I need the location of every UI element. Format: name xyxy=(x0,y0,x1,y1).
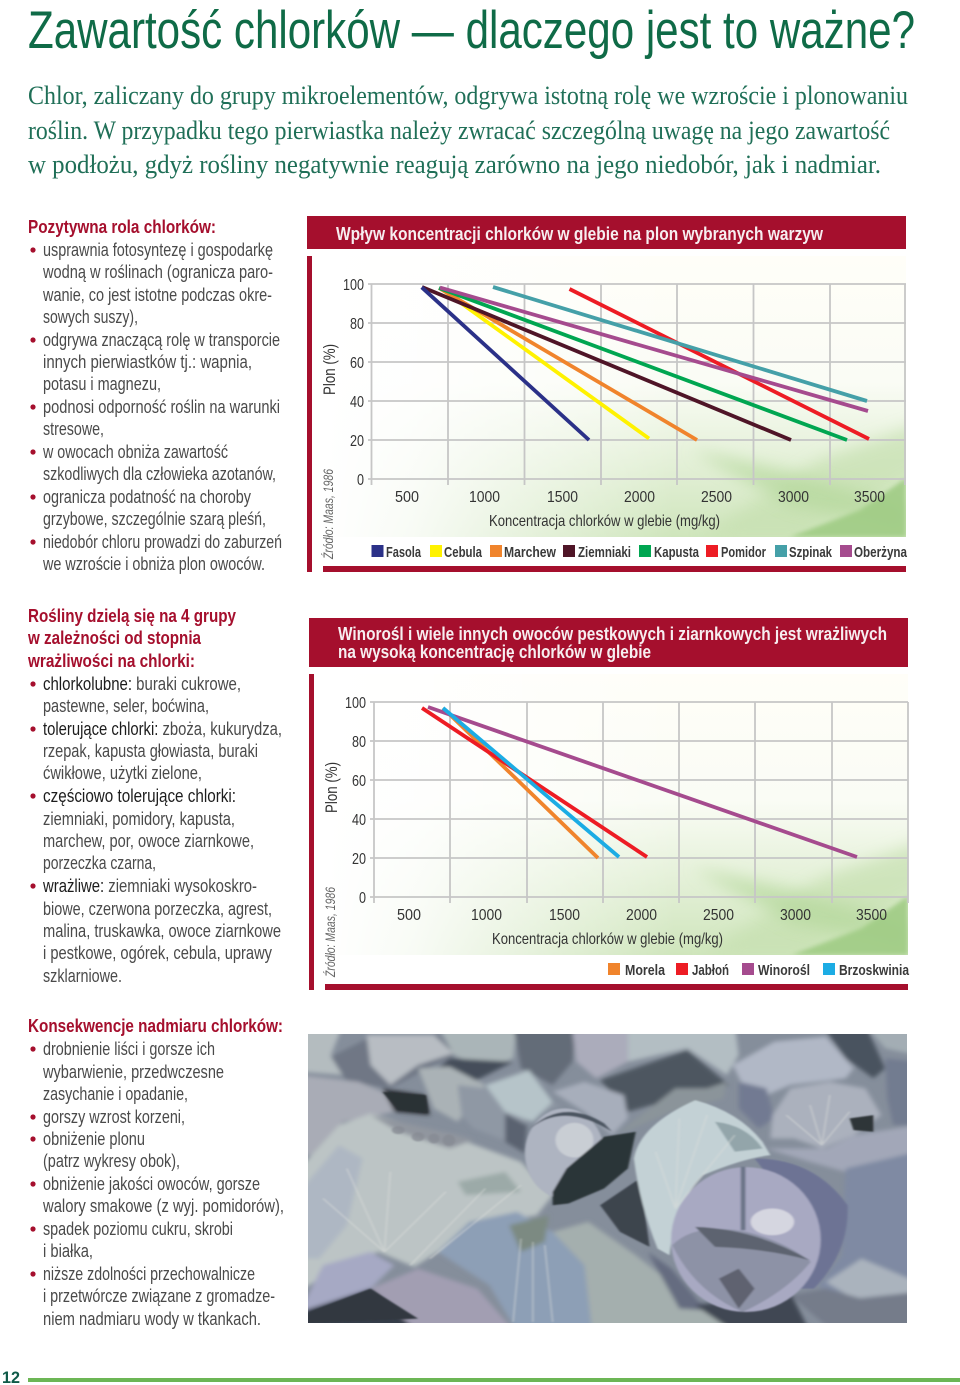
text block: plant sensitivity groups: Rośliny dzielą się na 4 grupy xyxy=(28,606,236,626)
chart 2 heading: na wysoką koncentrację chlorków w glebie xyxy=(338,641,651,662)
text block: consequences of excess chlorides: wybarwienie, przedwczesne xyxy=(42,1062,224,1082)
text block: positive role of chlorides: Pozytywna rola chlorków: xyxy=(28,217,216,237)
chart 1 legend xyxy=(372,544,908,561)
chart 2 axis labels: 100 xyxy=(345,695,366,712)
chart 1 axis labels: 500 xyxy=(395,489,419,506)
chart 2 axis labels: 20 xyxy=(352,851,366,868)
chart 1 axis labels: 1000 xyxy=(469,489,500,506)
text block: positive role of chlorides: niedobór chloru prowadzi do zaburzeń xyxy=(43,532,282,552)
text block: plant sensitivity groups: wrażliwości na chlorki: xyxy=(27,651,195,671)
chart 2 axis labels: 500 xyxy=(397,907,421,924)
chart 2 axis labels: 60 xyxy=(352,773,366,790)
chart 1 axis labels: 3000 xyxy=(778,489,809,506)
text block: plant sensitivity groups: tolerujące chlorki: zboża, kukurydza, xyxy=(43,719,282,739)
text block: positive role of chlorides: we wzroście i obniża plon owoców. xyxy=(42,554,265,574)
text block: positive role of chlorides: podnosi odporność roślin na warunki xyxy=(43,397,280,417)
text block: positive role of chlorides: stresowe, xyxy=(43,419,104,439)
chart 2 axis labels: 3000 xyxy=(780,907,811,924)
chart 2 legend: Jabłoń xyxy=(692,962,729,979)
chart 1 axis labels: 100 xyxy=(343,277,364,294)
chart 2 legend: Winorośl xyxy=(758,962,810,979)
footer rule xyxy=(28,1378,960,1382)
text block: plant sensitivity groups: szklarniowe. xyxy=(43,966,122,986)
text block: consequences of excess chlorides xyxy=(28,1016,284,1329)
chart 1 axis labels: 1500 xyxy=(547,489,578,506)
text block: positive role of chlorides: sowych suszy), xyxy=(43,307,138,327)
text block: plant sensitivity groups: porzeczka czarna, xyxy=(43,853,156,873)
chart 2 axis labels: 2000 xyxy=(626,907,657,924)
chart 2 lines xyxy=(422,707,857,858)
text block: consequences of excess chlorides: obniżenie plonu xyxy=(43,1129,145,1149)
text block: plant sensitivity groups xyxy=(27,606,282,986)
text block: consequences of excess chlorides: Konsekwencje nadmiaru chlorków: xyxy=(28,1016,283,1036)
text block: plant sensitivity groups: malina, truskawka, owoce ziarnkowe xyxy=(43,921,281,941)
chart 2 axis labels: 1000 xyxy=(471,907,502,924)
photo: red cabbage field xyxy=(308,1034,907,1323)
panel: fruit yield chart xyxy=(309,618,932,990)
chart 1 legend: Cebula xyxy=(444,544,482,561)
chart 2 axis labels: Koncentracja chlorków w glebie (mg/kg) xyxy=(492,931,723,948)
text block: consequences of excess chlorides: walory smakowe (z wyj. pomidorów), xyxy=(42,1196,284,1216)
intro paragraph: w podłożu, gdyż rośliny negatywnie reagują zarówno na jego niedobór, jak i nadmiar. xyxy=(28,150,881,179)
text block: positive role of chlorides: usprawnia fotosyntezę i gospodarkę xyxy=(43,240,273,260)
chart 1 legend: Pomidor xyxy=(721,544,766,561)
chart 2 axis labels: Plon (%) xyxy=(322,762,341,813)
chart 1 axis labels: 3500 xyxy=(854,489,885,506)
text block: plant sensitivity groups: ćwikłowe, użytki zielone, xyxy=(43,763,202,783)
text block: consequences of excess chlorides: zasychanie i opadanie, xyxy=(43,1084,188,1104)
chart 1 legend: Szpinak xyxy=(789,544,832,561)
chart 1 axis labels: Koncentracja chlorków w glebie (mg/kg) xyxy=(489,513,720,530)
text block: plant sensitivity groups: pastewne, seler, boćwina, xyxy=(43,696,209,716)
chart 2 axis labels: 1500 xyxy=(549,907,580,924)
text block: plant sensitivity groups: rzepak, kapusta głowiasta, buraki xyxy=(43,741,258,761)
chart 2 axis labels: Źródło: Maas, 1986 xyxy=(323,887,338,978)
text block: consequences of excess chlorides: niem nadmiaru wody w tkankach. xyxy=(43,1309,261,1329)
text block: positive role of chlorides: szkodliwych dla człowieka azotanów, xyxy=(43,464,276,484)
chart 1 axis labels: Źródło: Maas, 1986 xyxy=(321,469,336,560)
intro paragraph xyxy=(28,81,908,179)
text block: consequences of excess chlorides: obniżenie jakości owoców, gorsze xyxy=(43,1174,260,1194)
text block: plant sensitivity groups: w zależności od stopnia xyxy=(27,628,202,648)
chart 1 axis labels: Plon (%) xyxy=(320,344,339,395)
chart 2 axis labels: 2500 xyxy=(703,907,734,924)
intro paragraph: Chlor, zaliczany do grupy mikroelementów, odgrywa istotną rolę we wzroście i plonowaniu xyxy=(28,81,908,110)
chart 1 legend: Fasola xyxy=(386,544,421,561)
chart 1 legend: Kapusta xyxy=(654,544,699,561)
chart 1 axis labels: 20 xyxy=(350,433,364,450)
chart 1 axis labels: 60 xyxy=(350,355,364,372)
text block: consequences of excess chlorides: spadek poziomu cukru, skrobi xyxy=(43,1219,233,1239)
chart 2 heading xyxy=(309,618,908,667)
chart 1 axis labels: 0 xyxy=(357,472,364,489)
text block: plant sensitivity groups: marchew, por, owoce ziarnkowe, xyxy=(43,831,254,851)
chart 1 axis labels xyxy=(320,277,885,560)
text block: positive role of chlorides: potasu i magnezu, xyxy=(43,374,161,394)
text block: plant sensitivity groups: wrażliwe: ziemniaki wysokoskro- xyxy=(42,876,257,896)
chart 1 axis labels: 2000 xyxy=(624,489,655,506)
chart 1 lines xyxy=(422,287,869,440)
chart 1 heading xyxy=(307,216,906,249)
chart 2 axis labels xyxy=(322,695,887,978)
chart 1 legend: Ziemniaki xyxy=(578,544,631,561)
text block: positive role of chlorides: odgrywa znaczącą rolę w transporcie xyxy=(43,330,280,350)
chart 1 heading: Wpływ koncentracji chlorków w glebie na plon wybranych warzyw xyxy=(336,223,824,244)
chart 2 legend: Brzoskwinia xyxy=(839,962,910,979)
chart 2 legend: Morela xyxy=(625,962,666,979)
text block: consequences of excess chlorides: (patrz wykresy obok), xyxy=(43,1151,180,1171)
intro paragraph: roślin. W przypadku tego pierwiastka należy zwracać szczególną uwagę na jego zawartość xyxy=(28,116,890,145)
text block: positive role of chlorides xyxy=(28,217,282,574)
chart 1 legend: Oberżyna xyxy=(854,544,908,561)
text block: plant sensitivity groups: ziemniaki, pomidory, kapusta, xyxy=(43,809,235,829)
text block: plant sensitivity groups: chlorkolubne: buraki cukrowe, xyxy=(43,674,241,694)
text block: positive role of chlorides: wanie, co jest istotne podczas okre- xyxy=(42,285,272,305)
chart 1 axis labels: 80 xyxy=(350,316,364,333)
chart 2 axis labels: 3500 xyxy=(856,907,887,924)
text block: plant sensitivity groups: biowe, czerwona porzeczka, agrest, xyxy=(43,899,272,919)
text block: positive role of chlorides: innych pierwiastków tj.: wapnia, xyxy=(43,352,252,372)
chart 2 axis labels: 40 xyxy=(352,812,366,829)
text block: plant sensitivity groups: częściowo tolerujące chlorki: xyxy=(43,786,236,806)
chart 1 legend: Marchew xyxy=(504,544,556,561)
chart 1 axis labels: 2500 xyxy=(701,489,732,506)
text block: consequences of excess chlorides: i białka, xyxy=(43,1241,93,1261)
text block: positive role of chlorides: grzybowe, szczególnie szarą pleśń, xyxy=(43,509,266,529)
text block: consequences of excess chlorides: drobnienie liści i gorsze ich xyxy=(43,1039,215,1059)
chart 1 axis labels: 40 xyxy=(350,394,364,411)
text block: positive role of chlorides: ogranicza podatność na choroby xyxy=(43,487,251,507)
text block: plant sensitivity groups: i pestkowe, ogórek, cebula, uprawy xyxy=(43,943,272,963)
chart 2 legend xyxy=(608,962,910,979)
panel: vegetable yield chart xyxy=(307,216,930,572)
text block: consequences of excess chlorides: niższe zdolności przechowalnicze xyxy=(43,1264,255,1284)
text block: positive role of chlorides: w owocach obniża zawartość xyxy=(42,442,228,462)
text block: consequences of excess chlorides: i przetwórcze związane z gromadze- xyxy=(43,1286,275,1306)
text block: positive role of chlorides: wodną w roślinach (ogranicza paro- xyxy=(42,262,273,282)
text block: consequences of excess chlorides: gorszy wzrost korzeni, xyxy=(43,1107,185,1127)
chart 2 axis labels: 0 xyxy=(359,890,366,907)
chart 2 axis labels: 80 xyxy=(352,734,366,751)
